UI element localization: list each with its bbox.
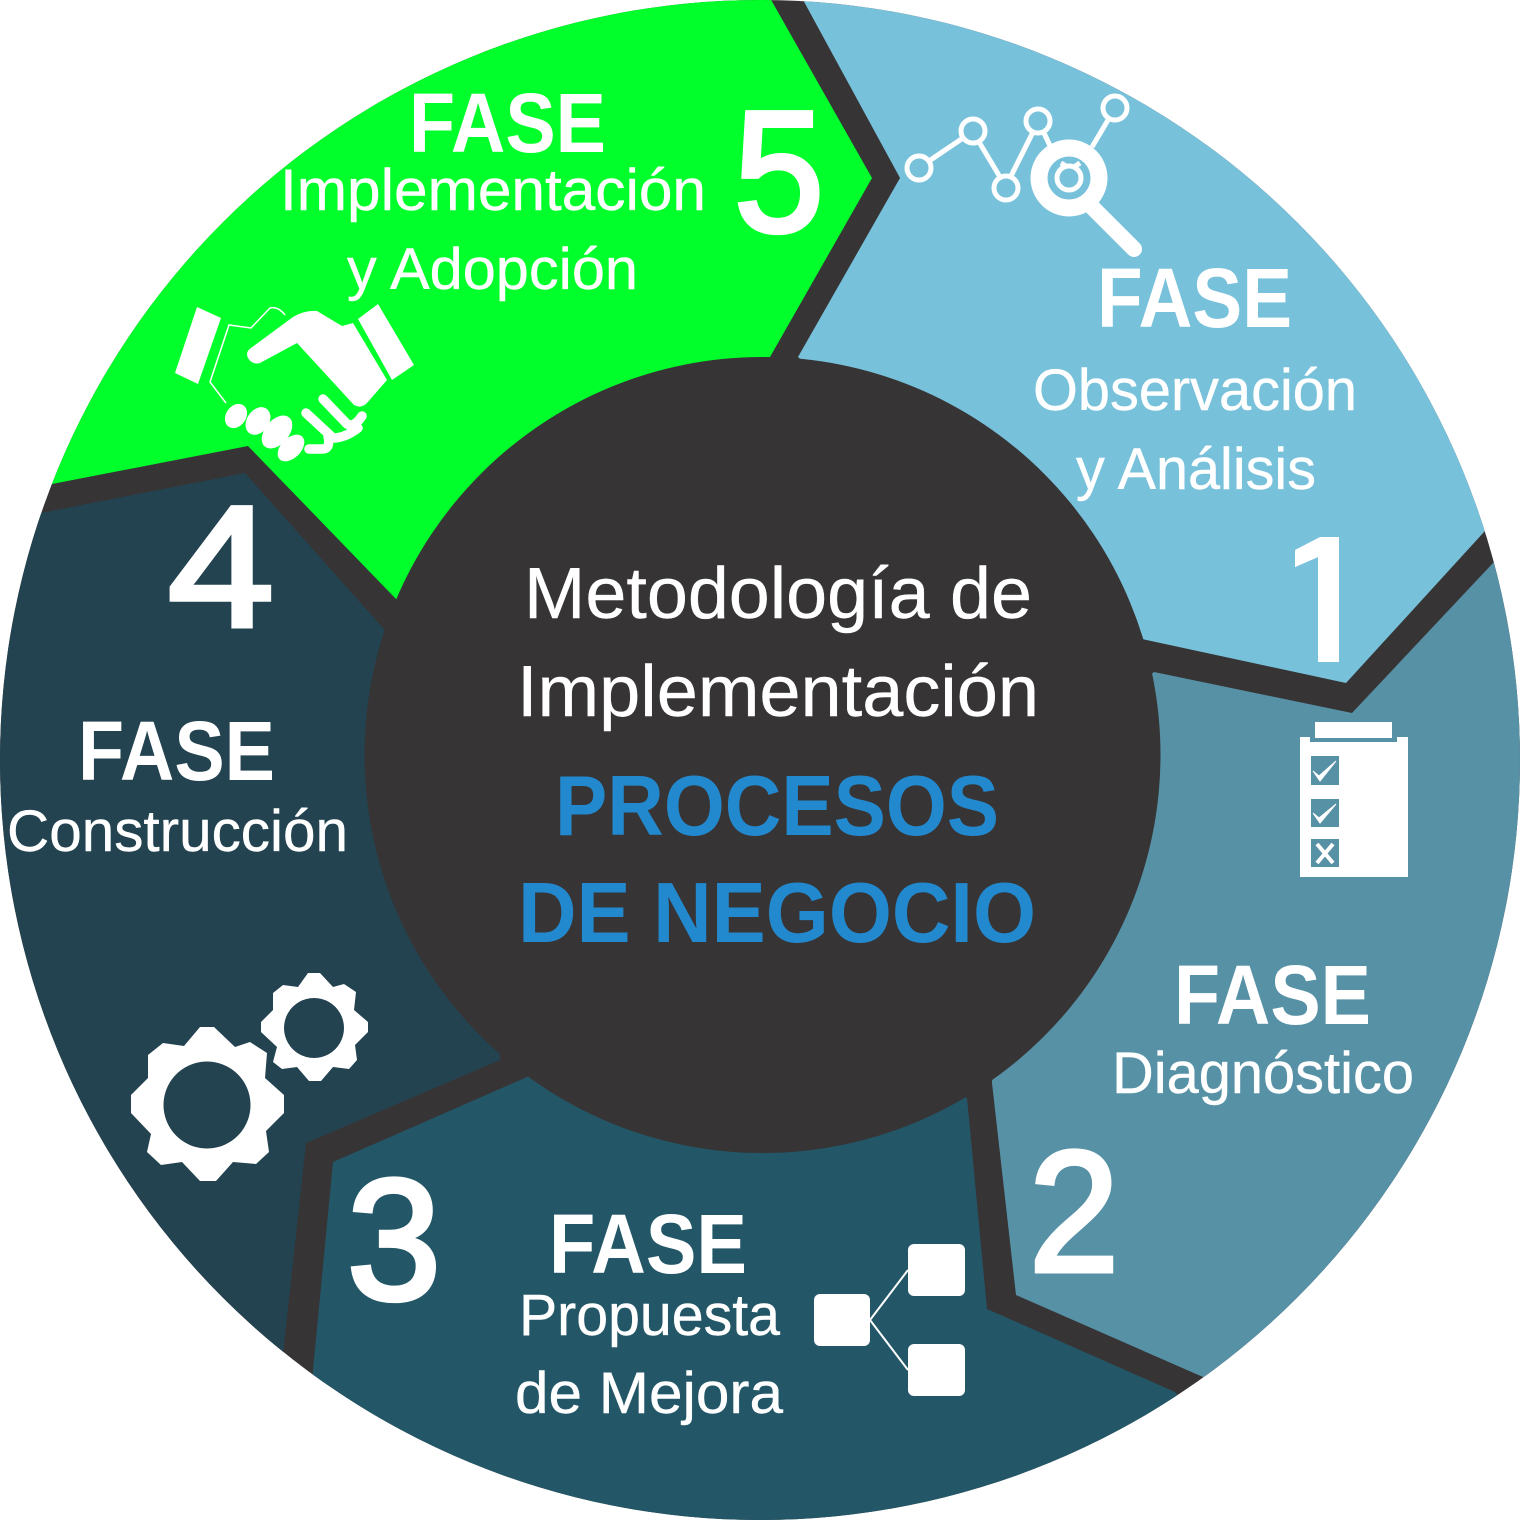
icon: analytics magnifier xyxy=(907,96,1134,249)
phase 3 text: de Mejora xyxy=(515,1361,784,1426)
center title xyxy=(517,554,1039,961)
center title: Metodología de xyxy=(524,554,1032,634)
phase 1 text: FASE xyxy=(1097,251,1292,345)
phase 3 text xyxy=(515,1197,784,1426)
number 2: 2 xyxy=(1029,1116,1119,1308)
icon: flow chart xyxy=(814,1244,965,1396)
number 5: 5 xyxy=(734,76,824,268)
center title: Implementación xyxy=(517,652,1039,732)
phase 2 text: FASE xyxy=(1174,948,1371,1042)
phase 1 text: y Análisis xyxy=(1076,437,1316,502)
segment 5 xyxy=(0,0,872,600)
center title: DE NEGOCIO xyxy=(518,866,1036,961)
center circle xyxy=(364,357,1160,1153)
icon: gears xyxy=(131,973,368,1181)
segment 2 xyxy=(992,562,1520,1378)
segment 1 xyxy=(798,0,1520,683)
phase 3 text: Propuesta xyxy=(519,1283,781,1348)
phase 2 text xyxy=(1112,948,1414,1106)
phase 1 text xyxy=(1033,251,1357,502)
phase 5 text xyxy=(280,76,706,302)
number 3: 3 xyxy=(347,1144,441,1336)
segment 3 xyxy=(312,1076,1178,1520)
number 1: 1 xyxy=(1278,505,1374,697)
phase 1 text: Observación xyxy=(1033,358,1357,423)
phase 2 text: Diagnóstico xyxy=(1112,1041,1414,1106)
phase 4 text xyxy=(7,704,348,864)
phase 4 text: FASE xyxy=(78,704,275,798)
phase 5 text: y Adopción xyxy=(347,237,638,302)
phase 4 text: Construcción xyxy=(7,799,348,864)
phase 3 text: FASE xyxy=(549,1197,747,1291)
center title: PROCESOS xyxy=(555,759,999,854)
icon: handshake xyxy=(175,304,414,466)
phase 5 text: Implementación xyxy=(280,158,706,223)
segment 4 xyxy=(0,473,500,1352)
phase 5 text: FASE xyxy=(409,76,606,170)
icon: clipboard checklist xyxy=(1300,722,1408,877)
number 4: 4 xyxy=(168,471,274,663)
number 1 xyxy=(1295,537,1339,662)
